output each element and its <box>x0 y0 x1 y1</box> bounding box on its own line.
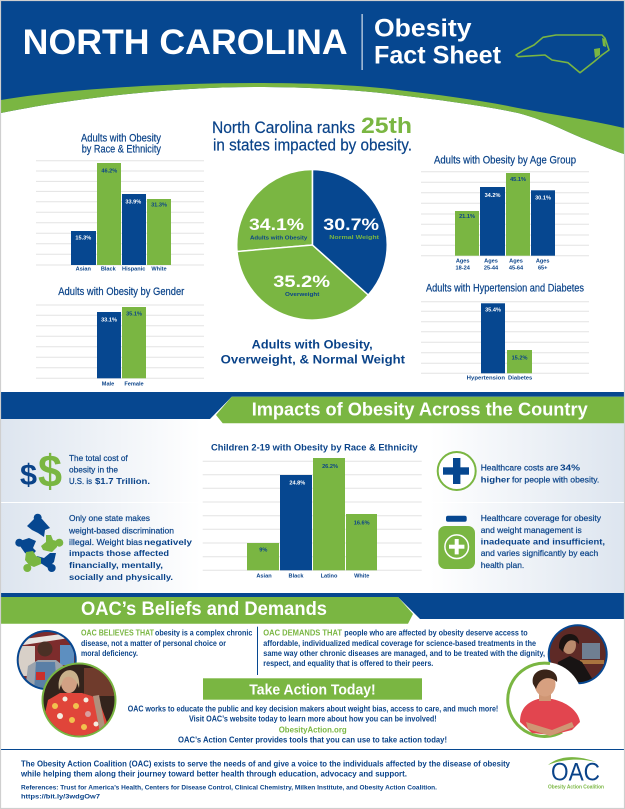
icon: medical cross <box>438 452 476 490</box>
text: OAC demands: respect, and equality that is offered to their peers. <box>263 659 433 668</box>
text: weight bias: socially and physically. <box>69 572 173 582</box>
bars: Black <box>101 267 117 273</box>
chart title: Adults with Obesity by Gender <box>58 286 185 298</box>
pie chart: weight categories: 35.2% <box>273 272 330 291</box>
text: healthcare coverage: health plan. <box>481 560 524 570</box>
section banner: impacts of obesity: Impacts of Obesity Across the Country <box>252 399 588 420</box>
bars: Asian <box>76 267 91 273</box>
bars: Diabetes <box>508 375 532 381</box>
text: OAC believes: disease, not a matter of personal choice or <box>81 639 227 648</box>
bars: 33.9% <box>125 199 141 205</box>
text: call to action: Visit OAC’s website today to learn more about how you can be involved! <box>189 715 437 724</box>
text: OAC demands: people who are affected by obesity deserve access to <box>344 629 528 638</box>
bars: 26.2% <box>322 464 338 470</box>
bars: Hispanic <box>122 267 145 273</box>
text: weight bias: weight-based discrimination <box>68 525 174 535</box>
footer: references <box>21 784 437 801</box>
text: OAC demands: same way other chronic diseases are managed, and to be treated with the dignity, <box>263 649 545 658</box>
bars <box>247 458 377 580</box>
text: weight bias: negatively <box>144 537 192 547</box>
bars: 18-24 <box>456 266 471 272</box>
bars: 16.6% <box>354 521 370 527</box>
bars: 33.1% <box>101 318 117 324</box>
chart title: Children 2-19 with Obesity by Race & Ethnicity <box>211 443 418 454</box>
footer: mission statement: while helping them along their journey toward better health through education, advocacy and support. <box>20 770 407 779</box>
footer: mission statement: The Obesity Action Coalition (OAC) exists to serve the needs of and give a voice to the individuals affected by the disease of obesity <box>21 760 510 769</box>
footer: mission statement <box>20 760 510 779</box>
logo: Obesity Action Coalition: OAC <box>551 759 600 787</box>
chart title: Adults with Obesity by Age Group <box>434 154 576 166</box>
bars: 45-64 <box>509 266 524 272</box>
heading: state rank: North Carolina ranks <box>212 119 355 137</box>
header banner <box>1 1 624 160</box>
chart: adults with obesity by gender <box>36 286 204 387</box>
bars: White <box>151 267 167 273</box>
bars: 46.2% <box>101 168 117 174</box>
bars: Male <box>102 381 114 387</box>
pie chart: weight categories: 34.1% <box>249 215 304 234</box>
pie chart caption: Overweight, & Normal Weight <box>221 354 405 366</box>
icon: dollar signs: $ <box>38 446 62 496</box>
bars: 21.1% <box>459 214 475 220</box>
photo: man in red shirt <box>506 662 582 738</box>
bars: 31.3% <box>151 203 167 209</box>
text: call to action: OAC’s Action Center provides tools that you can use to take action today! <box>178 736 447 745</box>
bars: Ages <box>536 258 550 264</box>
title: North Carolina: NORTH CAROLINA <box>23 22 348 62</box>
panel: healthcare costs <box>438 452 599 490</box>
pie chart: weight categories: Normal Weight <box>329 235 379 241</box>
text: weight bias: impacts those affected <box>69 548 169 558</box>
bars: 30.1% <box>535 195 551 201</box>
bars: 15.3% <box>75 235 91 241</box>
bars <box>71 163 171 273</box>
footer: references: https://bit.ly/3wdgOw7 <box>21 794 101 801</box>
icon: dollar signs <box>20 446 62 496</box>
bars: 35.4% <box>485 307 501 313</box>
photo: woman with dark hair <box>548 624 608 685</box>
text: healthcare coverage: and weight management is <box>481 525 582 535</box>
bars: Ages <box>456 258 470 264</box>
section banner: beliefs and demands: OAC’s Beliefs and Demands <box>81 599 327 620</box>
photo: woman in floral dress <box>42 662 116 738</box>
pie chart: weight categories <box>237 169 387 320</box>
text: total cost of obesity: U.S. is <box>69 476 93 486</box>
section banner: impacts of obesity <box>1 392 624 423</box>
bars: 24.8% <box>289 480 305 486</box>
text: total cost of obesity: The total cost of <box>69 453 128 463</box>
bars: Ages <box>484 258 498 264</box>
footer: references: References: Trust for America’s Health, Centers for Disease Control, Clinical Chemistry, Milken Institute, and Obesity Action Coalition. <box>21 784 437 791</box>
bars: 9% <box>259 548 267 554</box>
bars: Asian <box>256 574 272 580</box>
chart: adults with obesity by age group <box>421 154 589 272</box>
text: OAC believes: moral deficiency. <box>81 649 138 658</box>
bars: 15.2% <box>512 355 527 361</box>
text: weight bias <box>68 513 192 582</box>
text: weight bias: Only one state makes <box>69 513 151 523</box>
heading: state rank: 25th <box>361 113 412 138</box>
bars: Hypertension <box>467 375 506 381</box>
text: call to action <box>128 705 498 745</box>
bars <box>455 173 555 272</box>
banner: take action today <box>203 678 422 700</box>
bars: 45.1% <box>510 177 526 183</box>
text: weight bias: illegal. Weight bias <box>69 537 143 547</box>
text: OAC demands: affordable, individualized medical coverage for science-based treatments in the <box>263 639 536 648</box>
pie chart caption: Adults with Obesity, <box>252 339 373 351</box>
bars: White <box>354 574 369 580</box>
bars: Ages <box>509 258 523 264</box>
bars <box>97 307 146 387</box>
text: OAC demands <box>263 629 545 668</box>
chart: adults with obesity by race and ethnicity <box>36 133 204 273</box>
text: healthcare coverage <box>481 513 605 570</box>
text: call to action: OAC works to educate the public and key decision makers about weight bias, access to care, and much more! <box>128 705 498 714</box>
text: OAC believes: OAC BELIEVES THAT <box>81 629 154 638</box>
panel backgrounds: impacts section <box>1 419 624 593</box>
panel: weight bias <box>15 513 192 582</box>
chart title: by Race & Ethnicity <box>82 144 162 156</box>
title: Obesity Fact Sheet: Obesity <box>374 15 472 43</box>
text: healthcare coverage: and varies significantly by each <box>481 548 598 558</box>
text: healthcare costs: Healthcare costs are <box>481 463 558 473</box>
title: Obesity Fact Sheet: Fact Sheet <box>374 41 502 69</box>
pie chart: weight categories: 30.7% <box>323 215 379 234</box>
text: healthcare costs: for people with obesity. <box>512 475 599 485</box>
heading: state rank: in states impacted by obesity. <box>213 136 412 154</box>
text: healthcare costs: higher <box>481 475 511 485</box>
chart title: Adults with Obesity <box>81 133 162 145</box>
text: healthcare costs: 34% <box>560 463 580 473</box>
text: weight bias: financially, mentally, <box>69 560 163 570</box>
text: healthcare costs <box>481 463 599 485</box>
pie chart caption <box>221 339 405 366</box>
pie chart: weight categories: Adults with Obesity <box>250 235 308 241</box>
bars: Female <box>124 381 144 387</box>
bars <box>467 303 532 381</box>
text: OAC demands: OAC DEMANDS THAT <box>263 629 342 638</box>
pie chart: weight categories: Overweight <box>285 292 319 298</box>
bars: 25-44 <box>484 266 499 272</box>
text: call to action: ObesityAction.org <box>279 726 347 735</box>
text: total cost of obesity: $1.7 Trillion. <box>95 476 150 486</box>
chart title: Adults with Hypertension and Diabetes <box>426 283 584 295</box>
heading: state rank <box>212 113 412 154</box>
photo: man in apron <box>17 630 77 690</box>
chart: children with obesity by race and ethnicity <box>203 443 422 580</box>
text: OAC believes: obesity is a complex chronic <box>155 629 253 638</box>
bars: Black <box>289 574 304 580</box>
text: healthcare coverage: Healthcare coverage for obesity <box>481 513 602 523</box>
icon: puzzle pieces <box>15 514 63 572</box>
bars: 34.2% <box>485 193 500 199</box>
text: OAC believes <box>81 629 253 658</box>
text: healthcare coverage: inadequate and insufficient, <box>481 536 605 546</box>
icon: North Carolina state outline <box>516 35 609 73</box>
title: Obesity Fact Sheet <box>374 15 502 69</box>
panel: healthcare coverage <box>438 513 605 570</box>
text: total cost of obesity <box>69 453 150 486</box>
chart: adults with hypertension and diabetes <box>421 283 589 381</box>
bars: 65+ <box>538 266 548 272</box>
icon: medicine bottle <box>438 516 475 569</box>
section banner: beliefs and demands <box>1 593 624 624</box>
bars: Latino <box>321 574 338 580</box>
bars: 35.1% <box>126 311 142 317</box>
icon: dollar signs: $ <box>20 459 37 492</box>
chart title <box>81 133 162 156</box>
text: total cost of obesity: obesity in the <box>69 464 118 474</box>
panel: total cost <box>20 446 150 496</box>
banner: take action today: Take Action Today! <box>249 681 376 698</box>
logo: Obesity Action Coalition: Obesity Action Coalition <box>548 784 605 790</box>
